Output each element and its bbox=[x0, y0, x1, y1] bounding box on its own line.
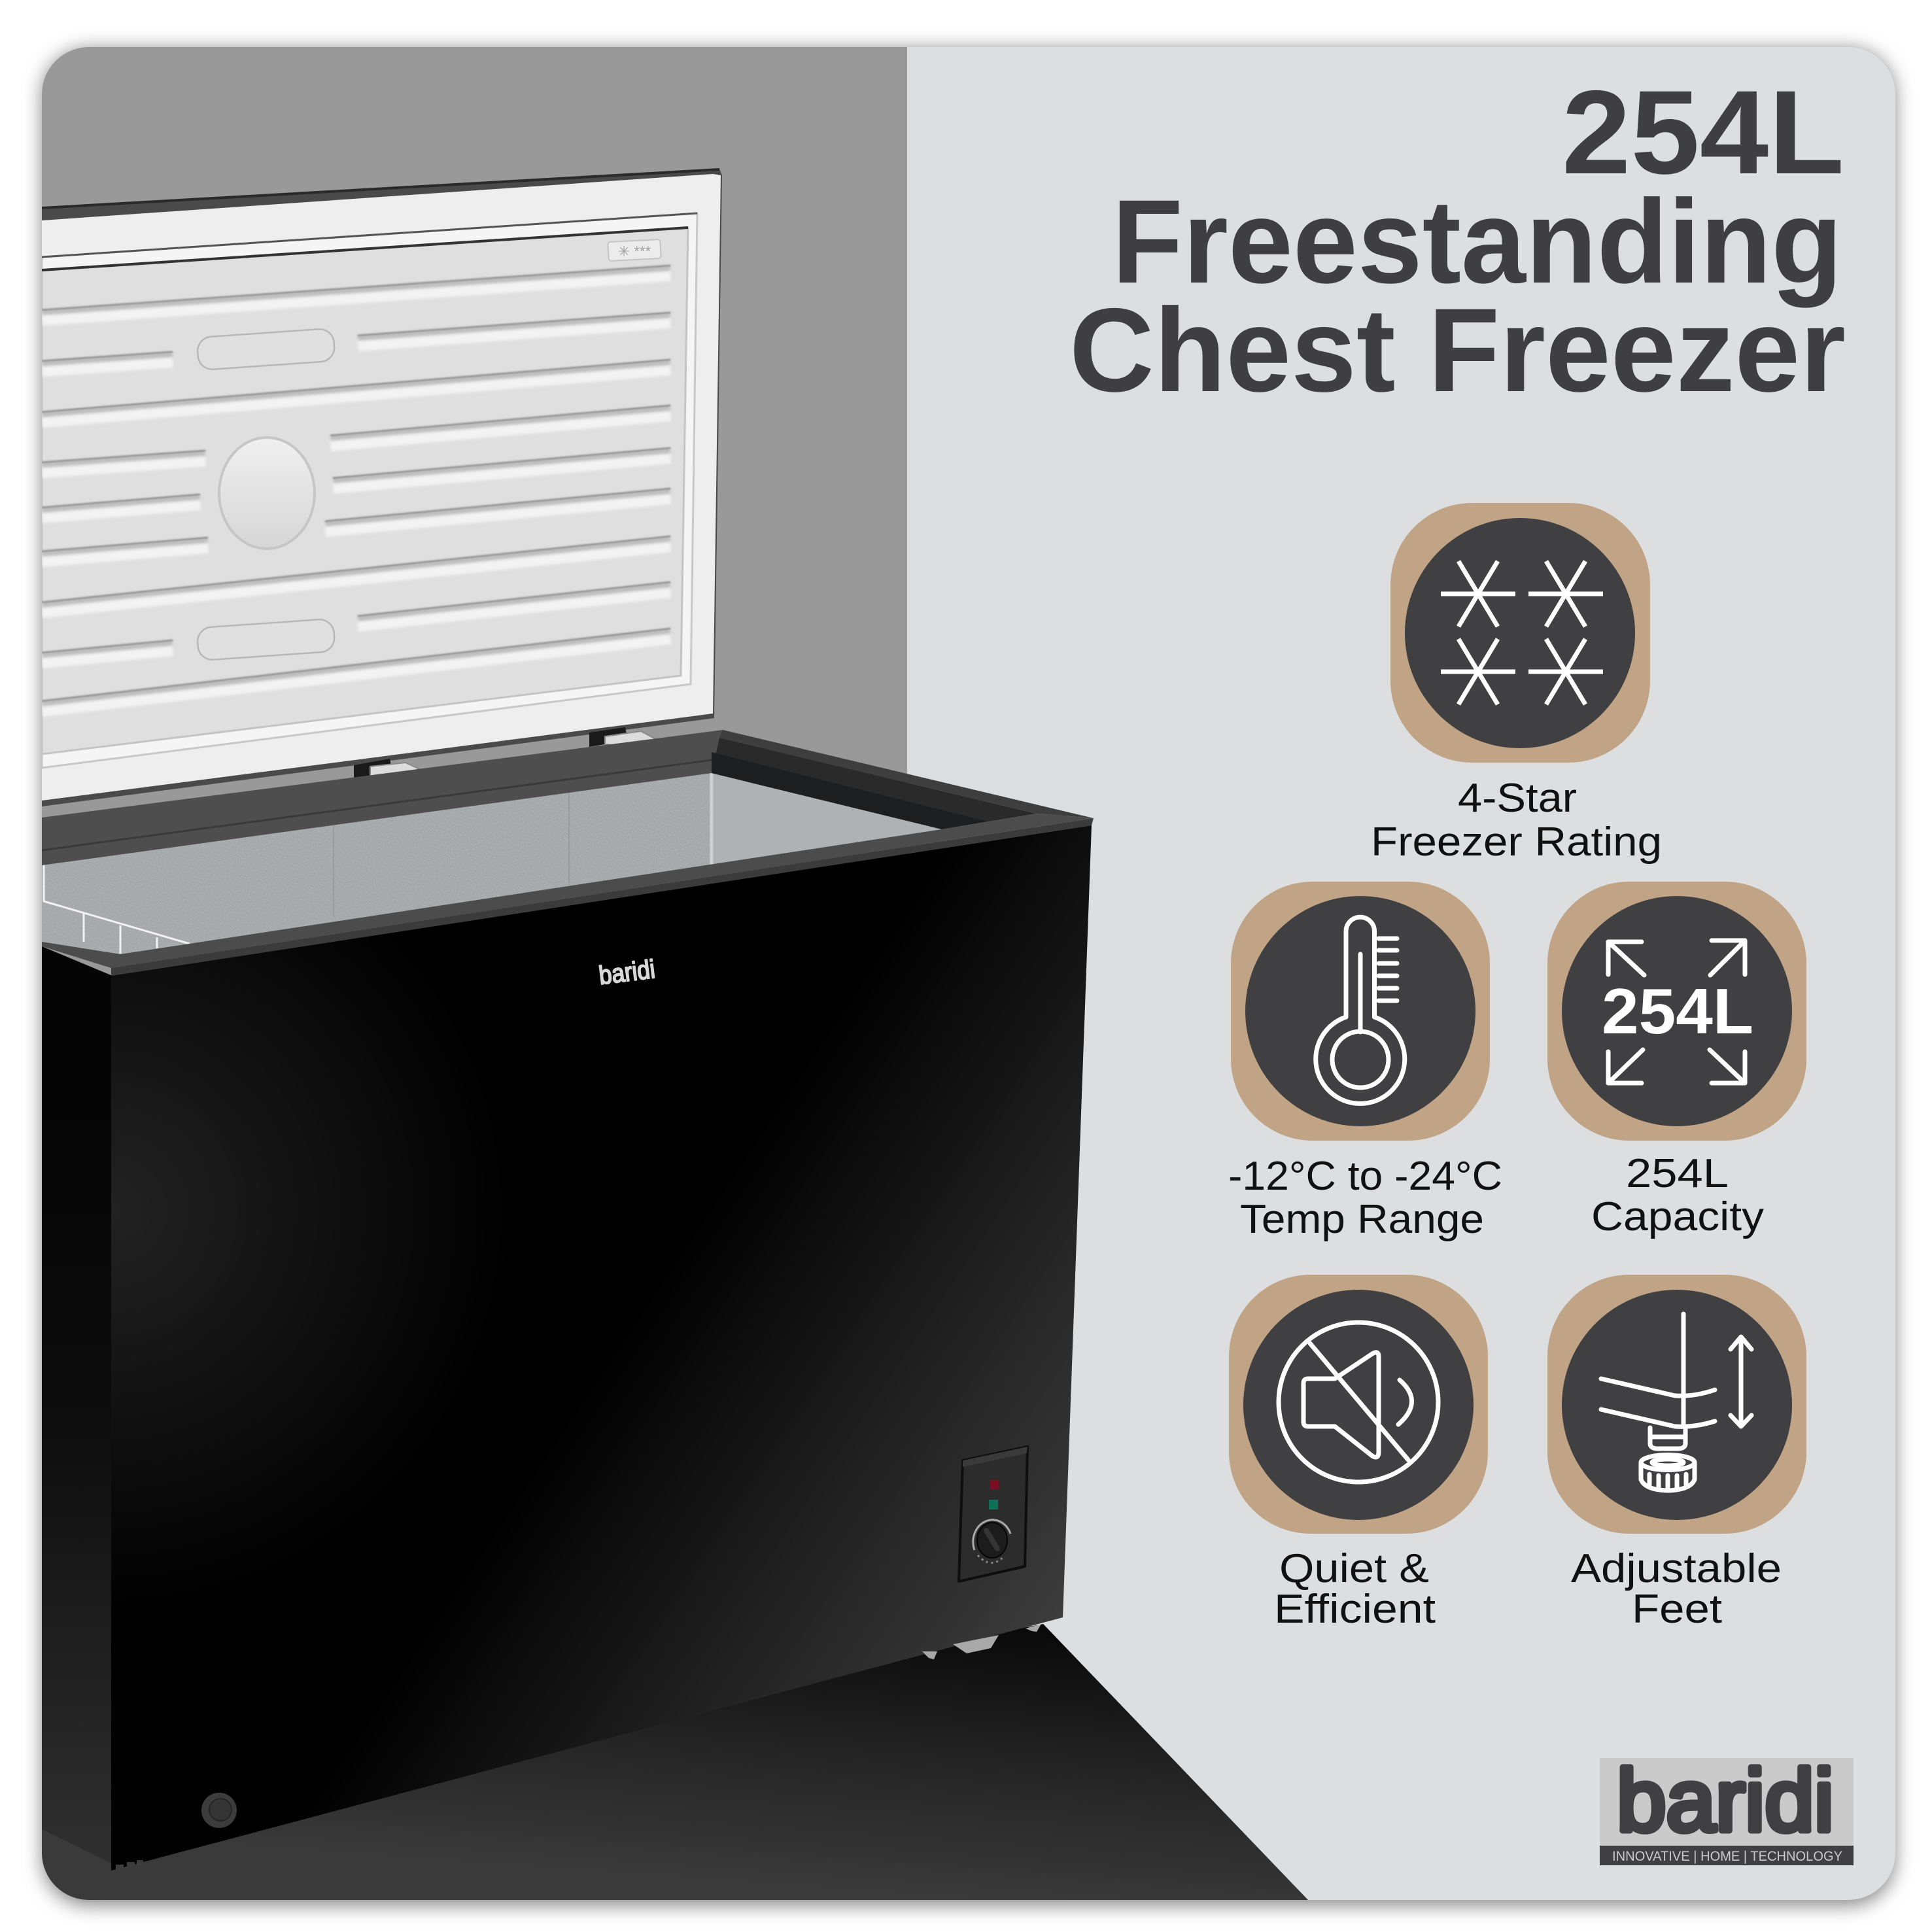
hinge right bbox=[589, 727, 658, 747]
icon: thermometer bbox=[1231, 882, 1490, 1141]
feet bbox=[922, 1624, 1041, 1659]
panel: light right background bbox=[907, 47, 1895, 1900]
base plug bbox=[201, 1793, 237, 1828]
lid ribs bbox=[42, 266, 670, 710]
label: capacity bbox=[1591, 1151, 1764, 1239]
front of body bbox=[111, 825, 1092, 1871]
label: temperature range: -12°C to -24°C bbox=[1228, 1154, 1502, 1199]
title line 2: Freestanding bbox=[1112, 175, 1842, 308]
side of body bbox=[42, 946, 112, 1864]
label: temperature range: Temp Range bbox=[1240, 1197, 1484, 1242]
control panel bbox=[959, 1447, 1027, 1581]
star rating plate: ✳ *** bbox=[618, 243, 651, 260]
label: quiet and efficient bbox=[1274, 1546, 1436, 1632]
title line 3: Chest Freezer bbox=[1069, 283, 1846, 417]
label: adjustable feet bbox=[1571, 1546, 1782, 1632]
label: quiet and efficient: Efficient bbox=[1274, 1587, 1436, 1632]
base feet blocks bbox=[116, 1860, 143, 1871]
label: adjustable feet: Feet bbox=[1632, 1587, 1722, 1632]
star rating plate bbox=[608, 239, 661, 261]
front logo: baridi bbox=[597, 955, 657, 990]
label: temperature range bbox=[1228, 1154, 1502, 1242]
brand logo: baridi bbox=[1617, 1752, 1834, 1850]
label: capacity: 254L bbox=[1626, 1151, 1729, 1196]
icon: 4-star rating bbox=[1390, 503, 1650, 763]
icon: quiet bbox=[1229, 1275, 1488, 1534]
panel: grey left background bbox=[42, 47, 907, 1900]
floor shadow bbox=[42, 1624, 1308, 1900]
icon: capacity bbox=[1547, 882, 1806, 1141]
label: 4-star rating: Freezer Rating bbox=[1371, 819, 1662, 865]
freezer lid bbox=[42, 169, 722, 806]
label: capacity: Capacity bbox=[1591, 1194, 1764, 1239]
thermostat dial bbox=[973, 1520, 1010, 1563]
power LED bbox=[990, 1480, 999, 1489]
title bbox=[1069, 65, 1846, 417]
lid recessed pill bottom bbox=[197, 619, 336, 661]
lid recessed pill top bbox=[197, 328, 336, 370]
lid recessed disc bbox=[219, 438, 315, 549]
icon: capacity: 254L bbox=[1602, 975, 1753, 1047]
label: 4-star rating bbox=[1371, 776, 1662, 865]
brand logo: INNOVATIVE | HOME | TECHNOLOGY bbox=[1612, 1849, 1842, 1864]
basket wire bbox=[44, 850, 190, 954]
run LED bbox=[989, 1500, 998, 1509]
label: quiet and efficient: Quiet & bbox=[1279, 1546, 1429, 1591]
freezer interior bbox=[42, 773, 942, 954]
hinge left bbox=[354, 759, 425, 778]
label: adjustable feet: Adjustable bbox=[1571, 1546, 1782, 1591]
chest freezer product bbox=[42, 169, 1094, 1871]
freezer rim bbox=[42, 730, 1094, 976]
label: 4-star rating: 4-Star bbox=[1458, 776, 1577, 821]
title line 1: 254L bbox=[1562, 65, 1844, 199]
icon: adjustable feet bbox=[1547, 1275, 1806, 1534]
